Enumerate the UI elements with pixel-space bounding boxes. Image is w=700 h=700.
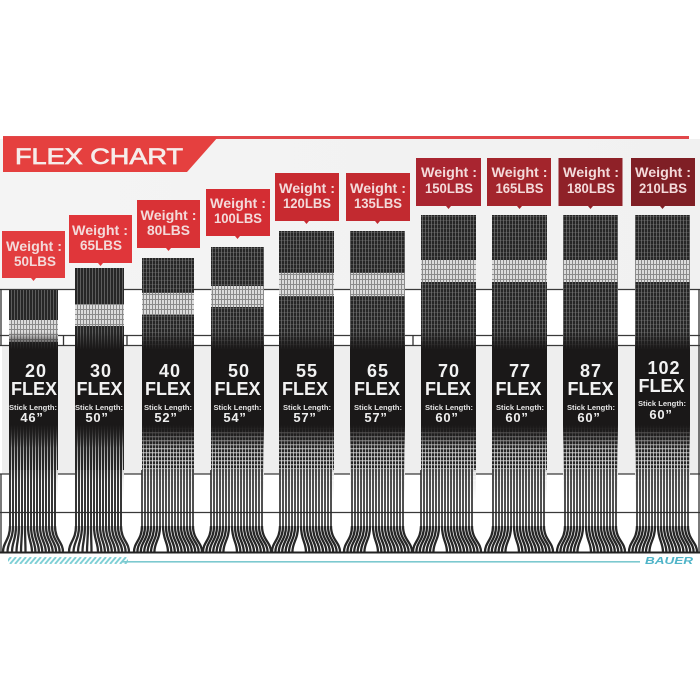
flex label: FLEX bbox=[11, 379, 57, 399]
title banner: FLEX CHART bbox=[3, 136, 689, 172]
flex label: 102 bbox=[647, 358, 681, 378]
flex label: FLEX bbox=[282, 379, 328, 399]
weight label bbox=[416, 158, 481, 209]
flex label bbox=[354, 361, 402, 425]
flex label: 50” bbox=[85, 410, 109, 425]
column: 65 flex bbox=[344, 173, 412, 552]
flex label: Stick Length: bbox=[144, 405, 192, 412]
flex label: 55 bbox=[296, 361, 318, 381]
weight label: Weight : bbox=[350, 181, 406, 196]
weight label: Weight : bbox=[492, 165, 548, 180]
flex label: 52” bbox=[154, 410, 178, 425]
flex label: 60” bbox=[649, 407, 673, 422]
flex label: 20 bbox=[25, 361, 47, 381]
weight label: Weight : bbox=[279, 181, 335, 196]
flex label: Stick Length: bbox=[283, 405, 331, 412]
column: 87 flex bbox=[557, 158, 625, 552]
flex label: 65 bbox=[367, 361, 389, 381]
weight label: 180LBS bbox=[567, 181, 615, 196]
flex label: 60” bbox=[435, 410, 459, 425]
flex label: 50 bbox=[228, 361, 250, 381]
weight label: 65LBS bbox=[80, 238, 122, 253]
flex label: FLEX bbox=[145, 379, 191, 399]
flex label: Stick Length: bbox=[567, 405, 615, 412]
flex label: 77 bbox=[509, 361, 531, 381]
weight label: 135LBS bbox=[354, 196, 402, 211]
weight label: Weight : bbox=[421, 165, 477, 180]
chart background bbox=[0, 139, 700, 552]
column: 20 flex bbox=[2, 231, 65, 552]
weight label: 100LBS bbox=[214, 211, 262, 226]
weight label: Weight : bbox=[635, 165, 691, 180]
weight label: 120LBS bbox=[283, 196, 331, 211]
flex label bbox=[282, 361, 331, 425]
flex label: FLEX bbox=[76, 379, 123, 399]
flex label: FLEX bbox=[495, 379, 542, 399]
logo: BAUER: BAUER bbox=[645, 556, 694, 567]
weight label: Weight : bbox=[210, 196, 266, 211]
flex label bbox=[567, 361, 615, 425]
weight label: 210LBS bbox=[639, 181, 687, 196]
weight label: 165LBS bbox=[496, 181, 544, 196]
flex label bbox=[495, 361, 544, 425]
flex label: Stick Length: bbox=[354, 405, 402, 412]
flex label: 60” bbox=[505, 410, 529, 425]
column: 70 flex bbox=[413, 158, 481, 552]
flex label: 46” bbox=[20, 410, 44, 425]
footer hatch and teal rule bbox=[8, 557, 640, 564]
flex label: FLEX bbox=[638, 376, 685, 396]
flex label bbox=[638, 358, 686, 422]
weight label: 150LBS bbox=[425, 181, 473, 196]
column: 50 flex bbox=[203, 189, 271, 552]
flex label: FLEX bbox=[425, 379, 471, 399]
flex label: Stick Length: bbox=[75, 405, 123, 412]
weight label bbox=[275, 173, 339, 224]
flex label: 70 bbox=[438, 361, 460, 381]
flex label: 57” bbox=[364, 410, 388, 425]
flex label: FLEX bbox=[567, 379, 614, 399]
weight label: Weight : bbox=[563, 165, 619, 180]
weight label: Weight : bbox=[140, 208, 196, 223]
flex label bbox=[425, 361, 473, 425]
column: 102 flex bbox=[629, 158, 697, 552]
flex label: FLEX bbox=[354, 379, 400, 399]
flex label: 60” bbox=[577, 410, 601, 425]
weight label: 50LBS bbox=[14, 254, 56, 269]
title banner: FLEX CHART: FLEX CHART bbox=[15, 144, 183, 169]
flex label: 54” bbox=[223, 410, 247, 425]
weight label bbox=[69, 215, 132, 266]
weight label bbox=[2, 231, 65, 281]
column: 77 flex bbox=[485, 158, 553, 552]
flex label: Stick Length: bbox=[496, 405, 544, 412]
flex label: Stick Length: bbox=[638, 401, 686, 408]
flex label: 57” bbox=[293, 410, 317, 425]
flex label: Stick Length: bbox=[214, 405, 262, 412]
weight label: 80LBS bbox=[147, 223, 190, 238]
weight label: Weight : bbox=[72, 223, 128, 238]
flex label bbox=[75, 361, 123, 425]
weight label bbox=[346, 173, 410, 224]
flex label bbox=[9, 361, 57, 425]
flex label: 30 bbox=[90, 361, 112, 381]
weight label bbox=[137, 200, 200, 251]
flex label: 40 bbox=[159, 361, 181, 381]
weight label bbox=[631, 158, 695, 209]
flex label: Stick Length: bbox=[9, 405, 57, 412]
weight label: Weight : bbox=[6, 239, 62, 254]
flex label: 87 bbox=[580, 361, 602, 381]
column: 40 flex bbox=[134, 200, 202, 552]
flex label bbox=[144, 361, 192, 425]
flex label: FLEX bbox=[214, 379, 261, 399]
column: 30 flex bbox=[69, 215, 132, 552]
weight label bbox=[487, 158, 551, 209]
weight label bbox=[206, 189, 270, 239]
weight label bbox=[558, 158, 622, 209]
flex label bbox=[214, 361, 262, 425]
column: 55 flex bbox=[272, 173, 340, 552]
flex label: Stick Length: bbox=[425, 405, 473, 412]
